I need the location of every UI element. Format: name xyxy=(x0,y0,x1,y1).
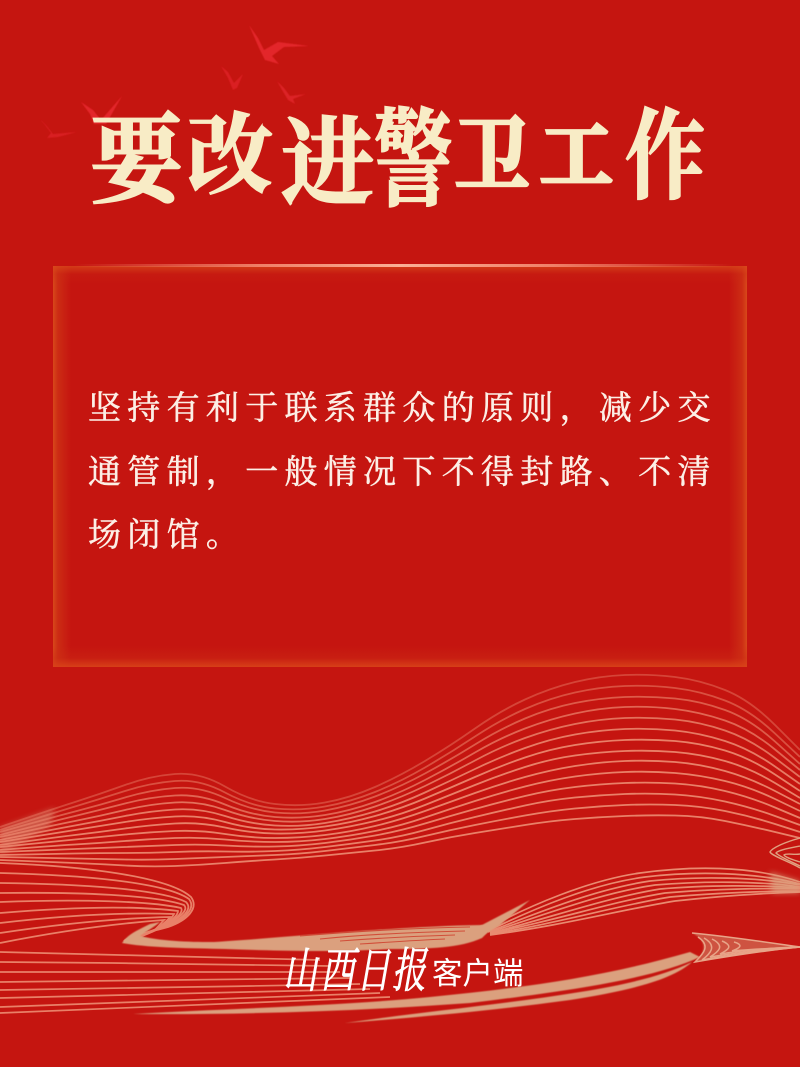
thin under tail xyxy=(345,962,692,1023)
upward wave fan xyxy=(482,868,800,935)
logo calligraphy: 日 xyxy=(354,946,397,998)
bird: near title xyxy=(81,96,122,124)
upper wave ribbon xyxy=(0,675,800,866)
title xyxy=(90,103,705,221)
upward fan tan start xyxy=(480,900,530,937)
bird: middle right xyxy=(277,81,306,104)
bird: middle left xyxy=(221,66,243,90)
title: 工 xyxy=(540,116,613,197)
lower flat wave lines xyxy=(0,952,390,1013)
bird: far left xyxy=(39,118,77,138)
lower long tan tail xyxy=(133,952,700,1014)
body text: 坚持有利于联系群众的原则，减少交 xyxy=(88,391,717,427)
logo xyxy=(281,946,524,998)
body text: 通管制，一般情况下不得封路、不清 xyxy=(88,454,717,490)
logo calligraphy: 山 xyxy=(281,946,324,998)
upward fan tan end xyxy=(770,872,800,893)
body text xyxy=(88,390,717,554)
title: 警 xyxy=(374,104,452,221)
logo calligraphy: 报 xyxy=(390,946,433,998)
panel: message box xyxy=(53,266,747,667)
logo client text: 客户端 xyxy=(432,957,524,991)
title: 作 xyxy=(625,103,705,212)
middle band stripes xyxy=(300,927,470,944)
title: 要 xyxy=(90,107,185,216)
right wisp xyxy=(692,933,800,962)
right edge loop xyxy=(770,838,800,868)
middle tan band xyxy=(122,922,490,951)
wisp tan fill xyxy=(692,933,800,962)
title: 改 xyxy=(187,107,273,205)
birds flock xyxy=(39,25,309,138)
logo calligraphy: 西 xyxy=(318,946,362,998)
bird: top large xyxy=(249,25,309,64)
body text: 场闭馆。 xyxy=(88,518,245,554)
title: 卫 xyxy=(455,111,529,202)
left hook wave xyxy=(0,863,194,943)
ribbon left bunching xyxy=(0,808,55,856)
title: 进 xyxy=(281,112,374,217)
